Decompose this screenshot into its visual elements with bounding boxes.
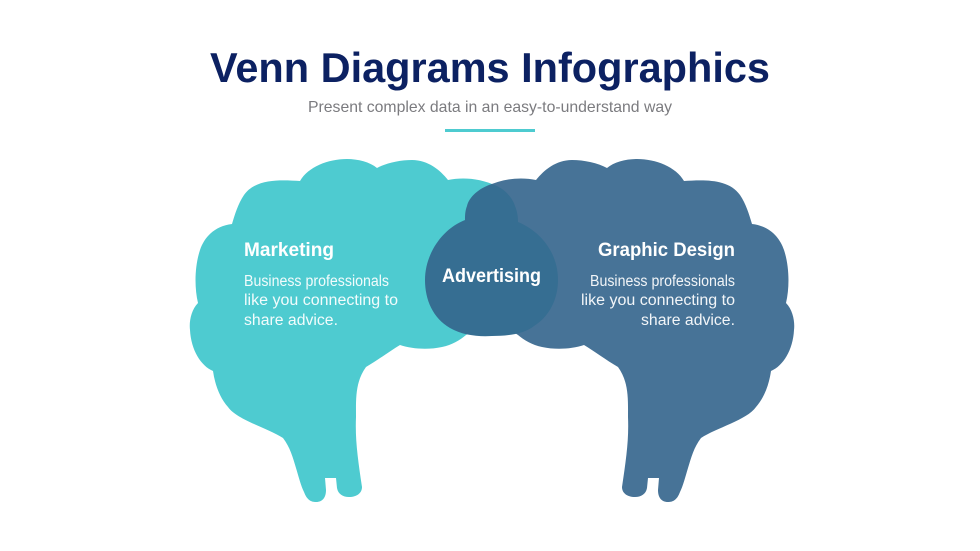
graphic design description: Business professionals: [590, 273, 735, 290]
marketing description: Business professionals: [244, 273, 389, 290]
graphic design text block: [581, 240, 735, 329]
right brain shape: graphic design: [464, 159, 794, 502]
title accent underline: [445, 129, 535, 132]
marketing description: like you connecting to: [244, 292, 398, 309]
marketing description: share advice.: [244, 312, 338, 329]
advertising label: Advertising: [442, 266, 541, 287]
graphic design description: like you connecting to: [581, 292, 735, 309]
marketing text block: [244, 240, 398, 329]
graphic design description: [581, 273, 735, 329]
left brain shape: marketing: [190, 159, 520, 502]
marketing description: [244, 273, 398, 329]
marketing heading: Marketing: [244, 240, 334, 261]
title: Venn Diagrams Infographics: [210, 44, 770, 91]
graphic design heading: Graphic Design: [598, 240, 735, 261]
subtitle: Present complex data in an easy-to-understand way: [308, 99, 672, 116]
center overlap shape: advertising: [425, 184, 558, 336]
graphic design description: share advice.: [641, 312, 735, 329]
